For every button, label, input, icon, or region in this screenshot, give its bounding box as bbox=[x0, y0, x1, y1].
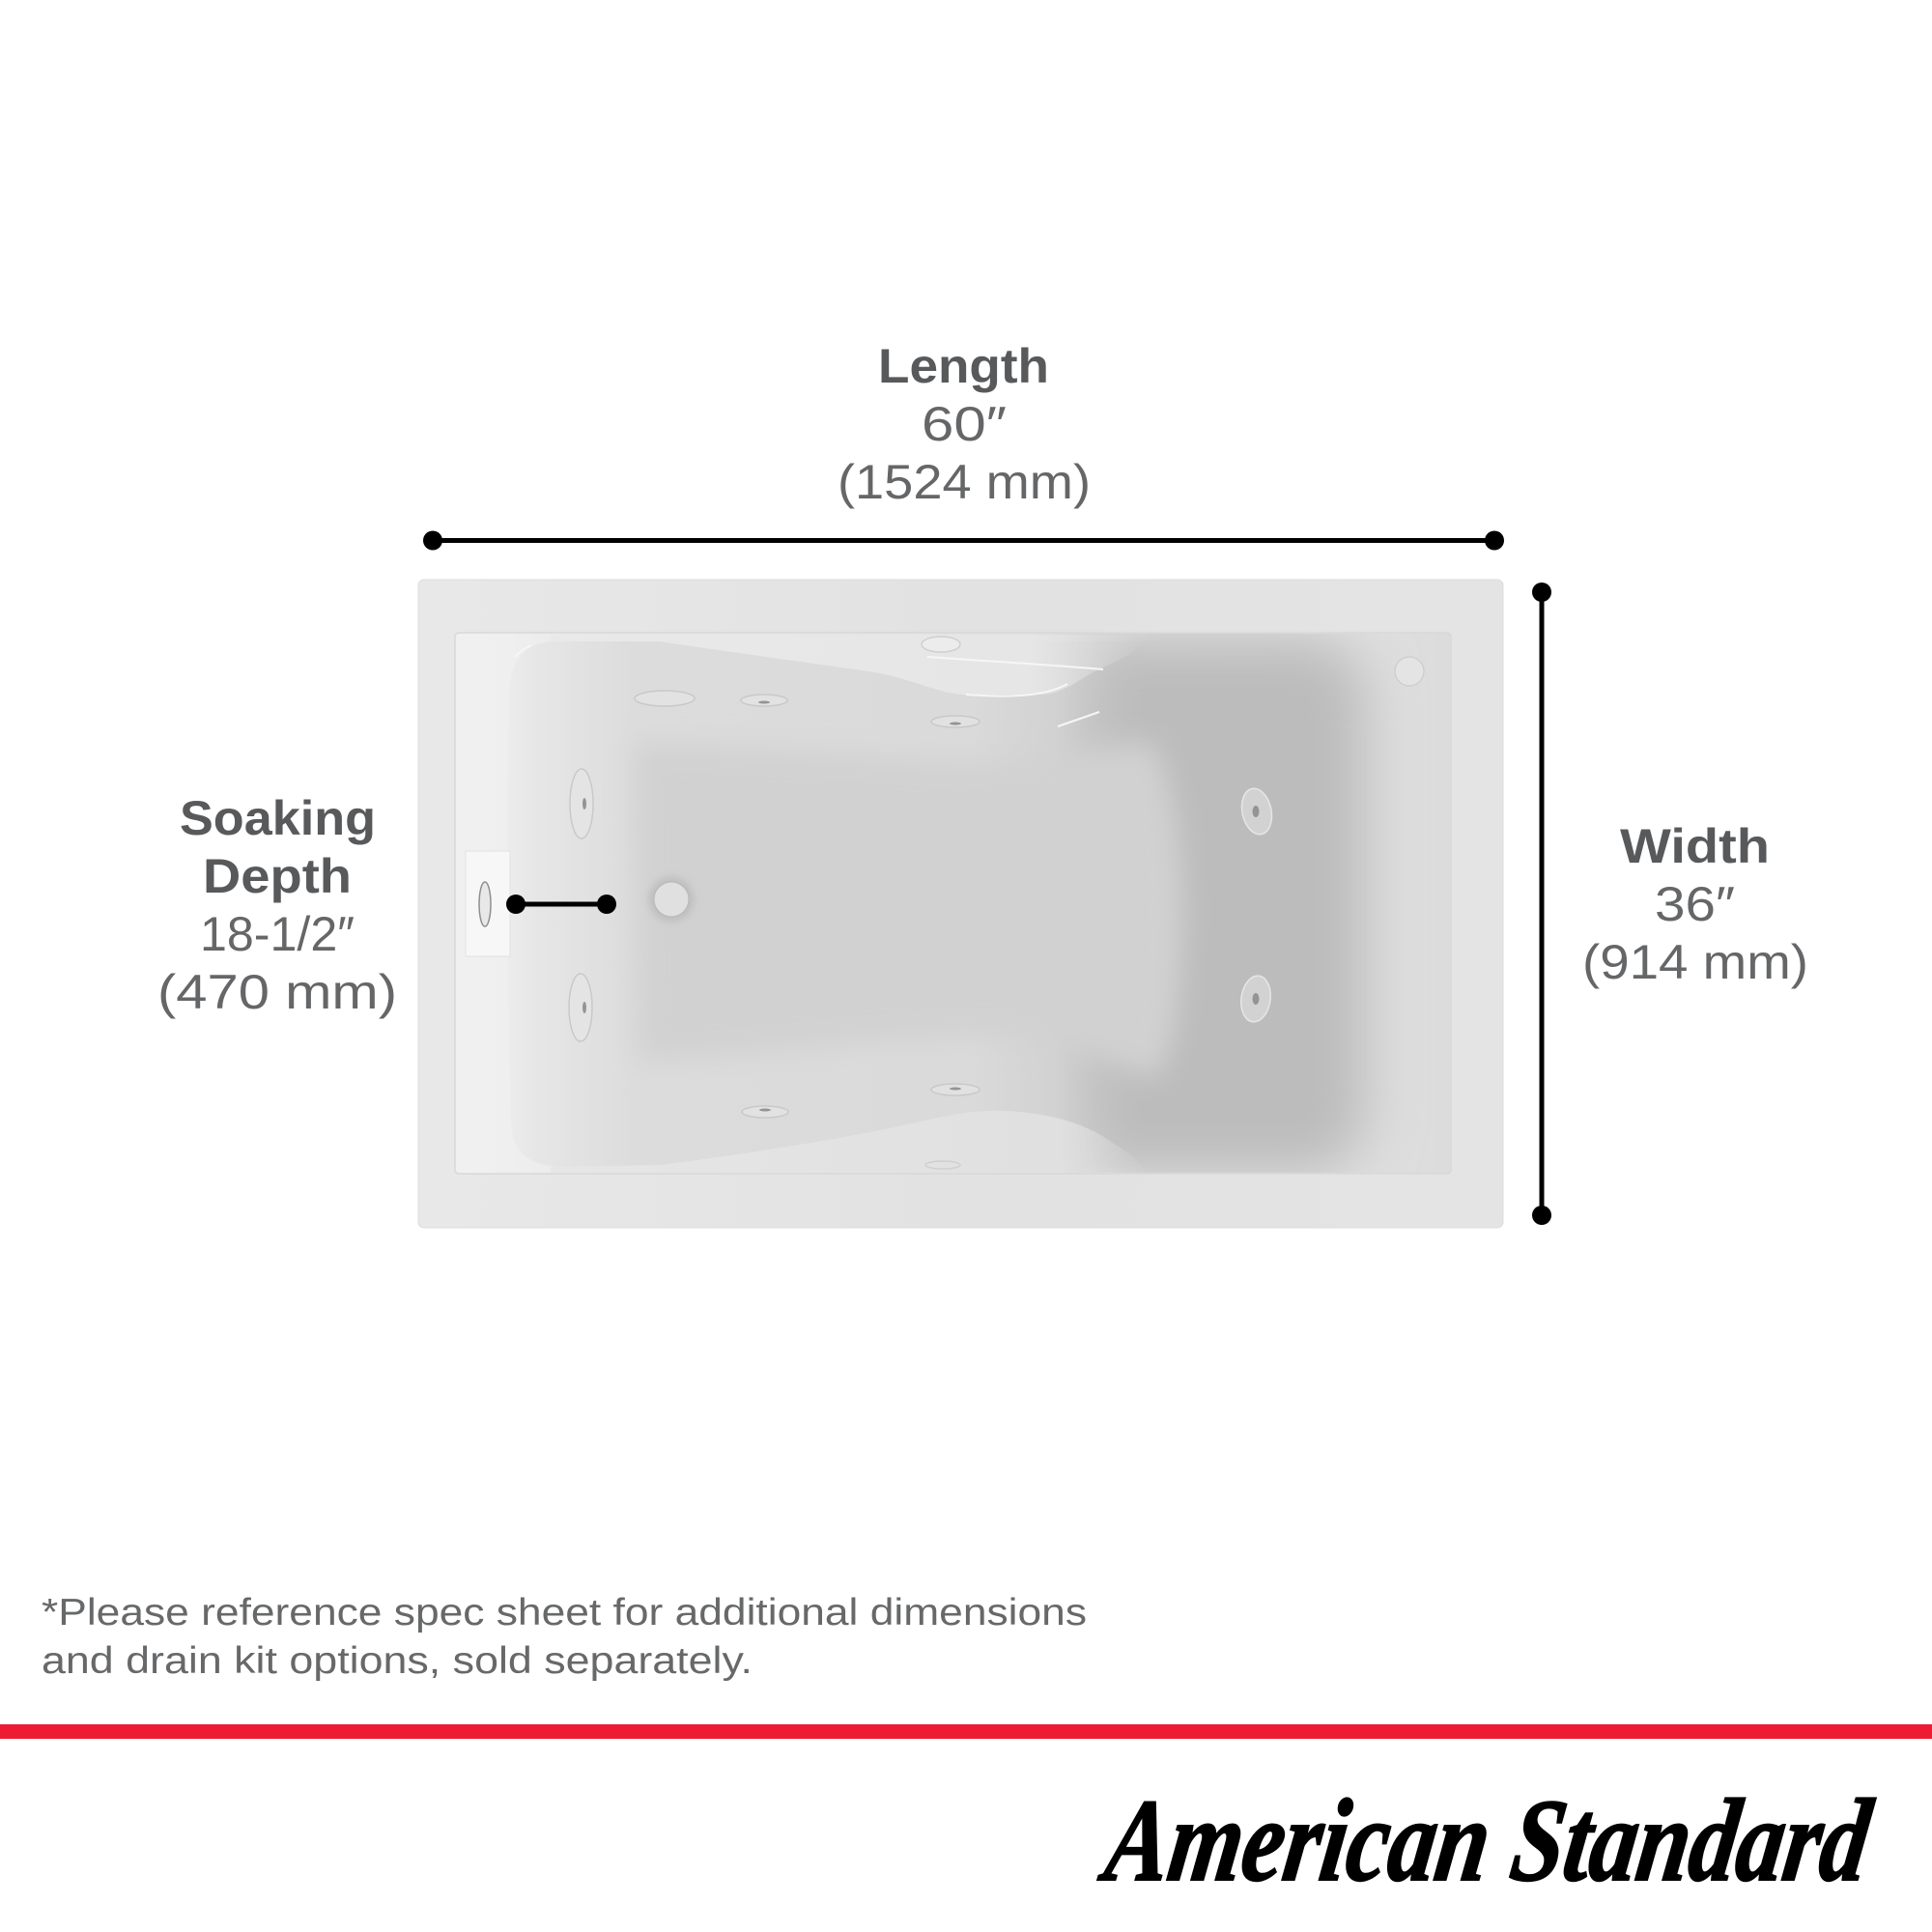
tub inner deck bbox=[455, 633, 1451, 1174]
length label: (1524 mm) bbox=[838, 455, 1091, 509]
width label: Width bbox=[1620, 819, 1770, 873]
footnote: and drain kit options, sold separately. bbox=[42, 1640, 753, 1682]
overflow plate bbox=[466, 851, 510, 956]
jet nozzles bbox=[582, 701, 1260, 1111]
tub floor bbox=[635, 743, 1183, 1079]
width label: (914 mm) bbox=[1582, 935, 1808, 989]
footnote bbox=[42, 1592, 1087, 1682]
top ledge bbox=[551, 635, 1154, 695]
width label bbox=[1582, 819, 1808, 989]
length dimension line bbox=[423, 531, 1504, 551]
basin bbox=[507, 641, 1159, 1167]
side jets bbox=[569, 691, 1276, 1118]
tub outer rim bbox=[418, 580, 1503, 1228]
length label bbox=[838, 339, 1091, 509]
drain bbox=[649, 877, 694, 922]
highlights bbox=[515, 645, 1103, 726]
soaking depth dimension line bbox=[506, 895, 616, 914]
soaking depth label: Soaking bbox=[180, 791, 376, 845]
red divider bar bbox=[0, 1724, 1932, 1739]
footnote: *Please reference spec sheet for additional dimensions bbox=[42, 1592, 1087, 1634]
soaking depth label: 18-1/2″ bbox=[200, 907, 355, 961]
length label: Length bbox=[878, 339, 1049, 393]
soaking depth label: (470 mm) bbox=[157, 965, 397, 1019]
width dimension line bbox=[1532, 582, 1551, 1225]
tub photo bbox=[418, 580, 1503, 1228]
bottom ledge bbox=[551, 1111, 1150, 1173]
overflow badge bbox=[479, 882, 491, 926]
dark head end of basin bbox=[1043, 638, 1367, 1174]
length label: 60″ bbox=[922, 397, 1007, 451]
deck fixtures bbox=[922, 637, 1424, 1169]
width label: 36″ bbox=[1655, 877, 1735, 931]
soaking depth label: Depth bbox=[203, 849, 352, 903]
soaking depth label bbox=[157, 791, 397, 1019]
